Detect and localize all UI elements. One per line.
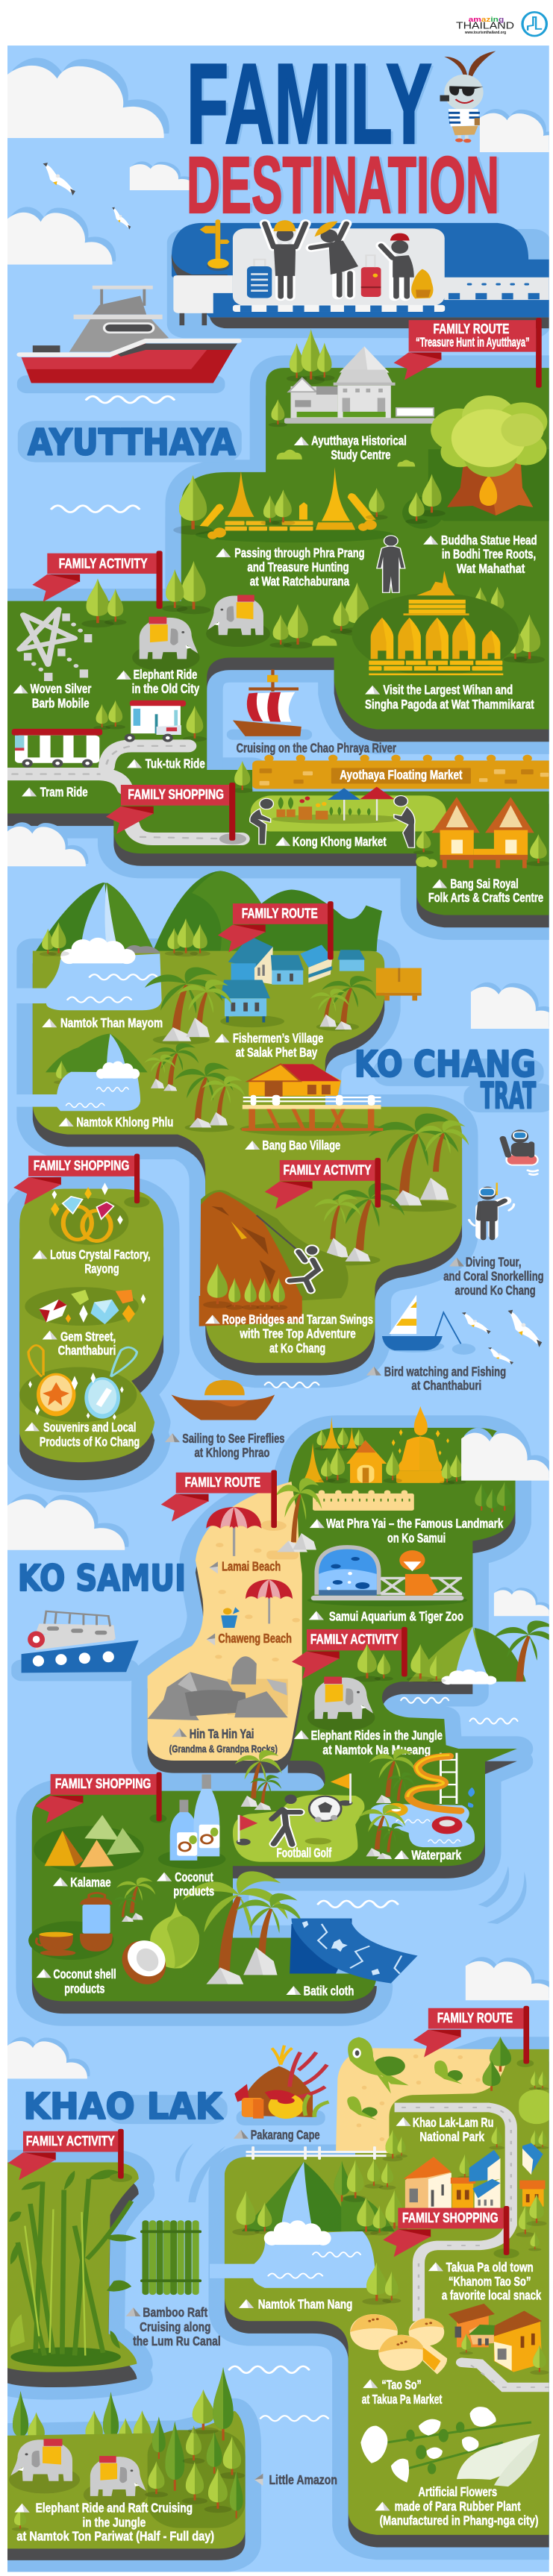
label: Gem Street: Gem Street, bbox=[60, 1330, 116, 1344]
label: Phra Prang and Treasure Hunting bbox=[216, 546, 365, 589]
label: Elephant Rides bbox=[294, 1729, 443, 1758]
Bang Bao Village stilt house bbox=[242, 1064, 383, 1131]
flag: FAMILY SHOPPING bbox=[106, 783, 246, 844]
label: Tram Ride bbox=[22, 786, 88, 800]
label: Lotus Crystal Factory: Rayong bbox=[84, 1262, 119, 1276]
flag: FAMILY ROUTE Treasure Hunt bbox=[394, 318, 542, 388]
island: Ko Chang bbox=[33, 951, 462, 1363]
label: Chaweng Beach bbox=[207, 1632, 292, 1646]
flag: FAMILY ACTIVITY Khao Lak: FAMILY ACTIVITY bbox=[26, 2133, 115, 2149]
lake waves bbox=[401, 1698, 518, 1724]
Takua Pa shophouses bbox=[449, 2304, 549, 2387]
icon: firefly long boat bbox=[172, 1380, 275, 1420]
label: Samui Aquarium bbox=[309, 1610, 463, 1624]
flag: FAMILY ACTIVITY Ko Chang: FAMILY ACTIVITY bbox=[284, 1162, 372, 1178]
flag: FAMILY SHOPPING Khao Lak bbox=[383, 2206, 519, 2258]
bamboo grove island bbox=[9, 2169, 137, 2366]
label: Bamboo Raft: Cruising along bbox=[140, 2320, 210, 2334]
flag: FAMILY ROUTE Khao Lak bbox=[413, 2006, 534, 2067]
label: Bamboo Raft: the Lum Ru Canal bbox=[133, 2334, 221, 2348]
artificial flowers and rubber leaves bbox=[360, 2407, 540, 2486]
label: Elephant Ride and Raft: Elephant Ride and Raft Cruising bbox=[36, 2501, 193, 2516]
cloud right of Samui bbox=[494, 1588, 552, 1616]
label: Souvenirs bbox=[25, 1420, 140, 1450]
label: Khao Lak-Lam Ru: Khao Lak-Lam Ru bbox=[413, 2116, 493, 2130]
flag: FAMILY SHOPPING Ko Chang bbox=[13, 1154, 149, 1208]
title: DESTINATION bbox=[190, 155, 499, 215]
label: Lotus Crystal Factory bbox=[32, 1248, 150, 1276]
label: Namtok Than Mayom: Namtok Than Mayom bbox=[60, 1016, 163, 1030]
label: Ayutthaya Historical Study Centre bbox=[294, 434, 407, 463]
label: Bamboo Raft bbox=[126, 2306, 221, 2348]
label: Coconut products: Coconut bbox=[175, 1870, 213, 1884]
island: Ko Chang shopping area bbox=[19, 1189, 163, 1462]
label: Kalamae bbox=[53, 1875, 111, 1890]
family figures and luggage bbox=[247, 220, 433, 298]
label: Takua Pa old town bbox=[428, 2260, 542, 2303]
cliff faces bbox=[7, 380, 549, 1480]
label: Ayutthaya Historical Study Centre: Study Centre bbox=[331, 448, 390, 463]
label: Souvenirs: Products of Ko Chang bbox=[40, 1435, 140, 1450]
Wat Thammikarat pagoda and lions bbox=[352, 571, 519, 676]
label: Chao Phraya cruise: Cruising on the Chao Phraya River bbox=[237, 742, 396, 756]
label: Woven Silver Barb Mobile bbox=[13, 682, 92, 711]
icon: swimmer with ring bbox=[503, 1129, 537, 1175]
icon: elephants at Ton Pariwat bbox=[9, 2439, 148, 2508]
label: Pakarang Cape bbox=[234, 2128, 320, 2143]
aquarium and tiger zoo bbox=[307, 1545, 467, 1606]
turtle beach sand bbox=[336, 2048, 508, 2153]
trees near flag bbox=[354, 1643, 446, 1683]
label: Kong Khong Market bbox=[275, 835, 387, 849]
label: Elephant Ride: in the Old City bbox=[132, 682, 200, 697]
icon: big coconut and palms bbox=[116, 1871, 302, 1988]
beach sand bbox=[148, 1482, 302, 1761]
label: Lamai Beach bbox=[209, 1560, 281, 1574]
icon: small turtles bbox=[347, 2061, 463, 2120]
label: Souvenirs: Souvenirs and Local bbox=[43, 1420, 136, 1435]
label: Gem Street: Chanthaburi bbox=[58, 1344, 116, 1358]
Khao Lak heading: KHAO LAK bbox=[23, 2087, 223, 2128]
flag: FAMILY SHOPPING Samui: FAMILY SHOPPING bbox=[55, 1776, 151, 1791]
label: Football Golf: Football Golf bbox=[276, 1846, 331, 1861]
label: Lotus Crystal Factory: Lotus Crystal Factory, bbox=[50, 1248, 150, 1262]
label: Waterpark bbox=[394, 1849, 462, 1863]
label: Fishermen's Village: Fishermen’s Village bbox=[233, 1032, 323, 1046]
Hin Ta Hin Yai rocks bbox=[148, 1656, 288, 1720]
cloud middle left bbox=[7, 207, 116, 265]
label: Coconut shell products: Coconut shell bbox=[53, 1967, 116, 1982]
hill and waterfall at Namtok Na Mueang bbox=[409, 1620, 553, 1685]
title: FAMILY bbox=[190, 63, 434, 145]
wave bbox=[318, 1901, 398, 1908]
Bodhi tree with Buddha head bbox=[402, 395, 549, 529]
logo: Amazing Thailand and tourism authority: amazing bbox=[469, 16, 504, 23]
road bbox=[395, 2108, 511, 2322]
label: Namtok Than Mayom bbox=[42, 1016, 163, 1030]
Samui lower scene bbox=[7, 1727, 553, 2143]
label: Elephant Ride bbox=[116, 668, 200, 697]
label: Batik cloth: Batik cloth bbox=[304, 1984, 354, 1999]
icon: Kalamae pyramids bbox=[34, 1815, 144, 1873]
label: Pakarang Cape: Pakarang Cape bbox=[251, 2128, 320, 2143]
label: Bamboo Raft: Bamboo Raft bbox=[143, 2306, 207, 2320]
label: Tuk-tuk Ride: Tuk-tuk Ride bbox=[146, 757, 205, 771]
label: Bang Sai bbox=[428, 877, 543, 906]
label: Sailing to See Fireflies: Sailing to See Fireflies bbox=[182, 1432, 284, 1446]
cloud right of Samui south bbox=[466, 1957, 553, 2000]
floating market wall bbox=[252, 755, 553, 789]
label: Coconut products: products bbox=[173, 1884, 214, 1899]
Ayutthaya scene bbox=[7, 329, 553, 868]
label: Tao So: at Takua Pa Market bbox=[362, 2392, 443, 2407]
road bbox=[7, 746, 242, 839]
label: Namtok Khlong Phlu: Namtok Khlong Phlu bbox=[76, 1115, 173, 1129]
standing visitor silhouette bbox=[378, 536, 404, 592]
label: Rope Bridges: with Tree Top Adventure bbox=[240, 1327, 356, 1341]
label: Tao So bbox=[362, 2378, 443, 2407]
label: Artificial Flowers: Artificial Flowers bbox=[418, 2485, 497, 2499]
label: Hin Ta Hin Yai: (Grandma & Grandpa Rocks) bbox=[169, 1743, 278, 1755]
Khao Lak upper beach bbox=[336, 2006, 553, 2322]
label: Lamai Beach: Lamai Beach bbox=[222, 1560, 281, 1574]
label: Chaweng Beach: Chaweng Beach bbox=[218, 1632, 292, 1646]
label: Samui Aquarium: Samui Aquarium & Tiger Zoo bbox=[329, 1610, 463, 1624]
label: Bird watching: at Chanthaburi bbox=[411, 1379, 481, 1394]
label: Tram Ride: Tram Ride bbox=[40, 786, 88, 800]
palms and rocks bbox=[144, 967, 469, 1262]
icon: yellow signpost bbox=[200, 219, 230, 271]
trees near national park bbox=[382, 2126, 549, 2161]
Khao Lak main scene bbox=[7, 2129, 549, 2548]
label: Kalamae: Kalamae bbox=[70, 1875, 111, 1890]
logo: Amazing Thailand and tourism authority: www.tourismthailand.org bbox=[464, 31, 506, 35]
label: Rope Bridges bbox=[205, 1313, 373, 1356]
bushes bbox=[276, 450, 415, 646]
label: Fishermen's Village bbox=[215, 1032, 323, 1060]
Namtok Khlong Phlu waterfall and lake bbox=[14, 1034, 148, 1111]
label: Wat Phra Yai bbox=[310, 1517, 504, 1546]
label: Ayutthaya Historical Study Centre: Ayutthaya Historical bbox=[311, 434, 407, 448]
label: Elephant Ride and Raft: in the Jungle bbox=[82, 2516, 146, 2530]
island: Ayutthaya bbox=[7, 368, 549, 915]
label: Bird watching bbox=[366, 1365, 506, 1394]
Namtok Than Mayom waterfall and lake bbox=[14, 918, 210, 1010]
Samui beach bbox=[148, 1494, 302, 1773]
local souvenirs pendants bbox=[19, 1345, 137, 1422]
cruise ship Ko Samui bbox=[11, 1611, 139, 1681]
Fishermen's Village blue houses bbox=[220, 936, 366, 1022]
label: Little Amazon: Little Amazon bbox=[269, 2473, 337, 2487]
flag: FAMILY ROUTE Ko Chang: FAMILY ROUTE bbox=[242, 906, 318, 921]
icon: snorkeller standing bbox=[469, 1182, 514, 1238]
floating market wall: Ayothaya Floating Market bbox=[340, 768, 463, 783]
Wat Phra Yai temple complex bbox=[302, 1406, 513, 1512]
label: Coconut shell products: products bbox=[64, 1982, 104, 1996]
flag: FAMILY ACTIVITY: FAMILY ACTIVITY bbox=[59, 556, 148, 571]
logo: Amazing Thailand and tourism authority bbox=[456, 12, 546, 36]
icon: coconut bottles bbox=[158, 1774, 225, 1869]
flag: FAMILY ACTIVITY Ko Chang bbox=[265, 1158, 381, 1209]
label: Elephant Ride: Elephant Ride bbox=[134, 668, 197, 682]
small palms bbox=[113, 1878, 155, 1922]
cruise ship with family on deck bbox=[167, 219, 551, 338]
gems bbox=[25, 1287, 146, 1326]
icon: bamboo raft bbox=[140, 2220, 201, 2295]
mascot with sunglasses and camera bbox=[440, 51, 496, 142]
flag: FAMILY ACTIVITY Khao Lak bbox=[8, 2129, 132, 2182]
icon: elephants bbox=[132, 595, 270, 671]
label: Wat Phra Yai: on Ko Samui bbox=[387, 1532, 446, 1546]
waterpark bbox=[358, 1749, 475, 1859]
Ko Chang heading bbox=[354, 1044, 553, 1118]
logo: Amazing Thailand and tourism authority: THAILAND bbox=[456, 20, 514, 31]
clouds in Ko Chang region bbox=[7, 822, 553, 1029]
fence bbox=[246, 2146, 387, 2160]
flag: FAMILY ROUTE Ko Chang bbox=[218, 901, 334, 960]
icon: batik cloth bbox=[290, 1919, 418, 1983]
label: Woven Silver Barb Mobile: Woven Silver bbox=[30, 682, 92, 697]
flag: FAMILY ACTIVITY Samui bbox=[292, 1627, 407, 1679]
cloud near Wat Phra Yai bbox=[461, 1428, 553, 1481]
icon: small sailboat bbox=[382, 1295, 475, 1355]
icon: large turtle bbox=[348, 2037, 409, 2093]
wooden pier bbox=[376, 968, 422, 1000]
Rope bridge cliff bbox=[199, 1190, 349, 1326]
forest on elephant land bbox=[12, 2367, 246, 2531]
label: Little Amazon bbox=[254, 2473, 337, 2487]
icon: gems, pendants and sail items around Ko Chang bbox=[7, 1287, 553, 1616]
label: Khao Lak-Lam Ru: National Park bbox=[419, 2130, 485, 2144]
Ayutthaya heading: AYUTTHAYA bbox=[28, 422, 236, 464]
ruins of Wat Ratchaburana bbox=[173, 467, 395, 542]
label: Bang Bao Village bbox=[245, 1138, 340, 1153]
label: Sailing to See Fireflies: at Khlong Phrao bbox=[194, 1446, 269, 1460]
label: Buddha Statue Head bbox=[423, 533, 537, 576]
old town houses bbox=[403, 2143, 547, 2251]
seagulls near Chanthaburi bbox=[462, 1310, 542, 1364]
swoosh lines bbox=[478, 1866, 527, 1924]
label: Tuk-tuk Ride bbox=[127, 757, 205, 771]
icon: tram bbox=[12, 729, 102, 768]
frame 1 header art bbox=[7, 41, 553, 403]
label: Elephant Ride and Raft: at Namtok Ton Pariwat (Half - Full day) bbox=[16, 2530, 214, 2544]
label: Phra Prang and Treasure Hunting: Passing through Phra Prang bbox=[234, 546, 365, 561]
label: Rope Bridges: Rope Bridges and Tarzan Swings bbox=[222, 1313, 373, 1327]
icon: Lotus crystal rings bbox=[49, 1182, 128, 1245]
icon: sailing junk on the Chao Phraya bbox=[227, 669, 312, 740]
label: Fishermen's Village: at Salak Phet Bay bbox=[236, 1046, 318, 1060]
label: Khao Lak-Lam Ru bbox=[396, 2116, 493, 2144]
label: Coconut products bbox=[157, 1870, 214, 1899]
label: Tao So: “Tao So” bbox=[381, 2378, 422, 2392]
seagulls bbox=[43, 163, 131, 230]
label: Elephant Rides: at Namtok Na Mueang bbox=[322, 1743, 431, 1758]
red and white motor yacht bbox=[17, 286, 239, 393]
label: Phra Prang and Treasure Hunting: and Treasure Hunting bbox=[247, 560, 349, 574]
flag: FAMILY SHOPPING Ko Chang: FAMILY SHOPPING bbox=[34, 1158, 129, 1173]
label: Diving Tour bbox=[443, 1256, 544, 1298]
label: Wat Thammikarat bbox=[365, 683, 534, 712]
swooshes bbox=[175, 2143, 225, 2202]
Ayutthaya heading bbox=[18, 421, 242, 464]
trees north Khao Lak bbox=[482, 2037, 553, 2124]
label: Rope Bridges: at Ko Chang bbox=[269, 1341, 325, 1356]
cloud top right bbox=[480, 109, 553, 152]
flag: FAMILY ROUTE Samui: FAMILY ROUTE bbox=[185, 1475, 260, 1490]
sand dots bbox=[357, 2055, 481, 2141]
label: Bang Bao Village: Bang Bao Village bbox=[262, 1138, 340, 1153]
label: Phra Prang and Treasure Hunting: at Wat Ratchaburana bbox=[250, 574, 350, 589]
Khao Lak lands bbox=[7, 2049, 549, 2560]
label: Elephant Ride and Raft bbox=[15, 2501, 214, 2544]
football golf green bbox=[233, 1773, 364, 1862]
icon: coconut shell lantern and cup bbox=[28, 1893, 113, 1960]
island: elephant land bbox=[7, 2410, 246, 2548]
label: Hin Ta Hin Yai: Hin Ta Hin Yai bbox=[190, 1727, 254, 1741]
beach decorations bbox=[148, 1478, 322, 1720]
label: Hin Ta Hin Yai bbox=[169, 1727, 278, 1755]
mountains behind Ko Chang bbox=[36, 871, 382, 951]
icon: elephant Samui bbox=[307, 1677, 375, 1732]
trees around Ayutthaya bbox=[81, 561, 550, 866]
label: Waterpark: Waterpark bbox=[411, 1849, 462, 1863]
flag: FAMILY ACTIVITY Samui: FAMILY ACTIVITY bbox=[310, 1632, 399, 1647]
flag: FAMILY ROUTE Samui bbox=[161, 1470, 287, 1531]
flag: FAMILY SHOPPING Samui bbox=[36, 1772, 166, 1823]
Ko Samui heading: KO SAMUI bbox=[18, 1558, 186, 1599]
label: Kong Khong Market: Kong Khong Market bbox=[293, 835, 387, 849]
waves bbox=[229, 2366, 328, 2421]
wave bbox=[265, 1382, 319, 1388]
icon: tuk-tuk bbox=[125, 701, 186, 742]
Ko Samui base: cliffs and land bbox=[11, 1313, 553, 2014]
label: Namtok Tham Nang bbox=[239, 2298, 352, 2312]
Tao So buns bbox=[350, 2314, 447, 2375]
cloud beside title bbox=[130, 161, 190, 190]
palms beside golf bbox=[235, 1750, 282, 1810]
label: Elephant Rides: Elephant Rides in the Jungle bbox=[311, 1729, 443, 1743]
label: Namtok Tham Nang: Namtok Tham Nang bbox=[258, 2298, 352, 2312]
label: Woven Silver Barb Mobile: Barb Mobile bbox=[32, 697, 90, 711]
forest behind elephant land bbox=[13, 2391, 154, 2448]
Ko Chang scene bbox=[13, 871, 553, 1462]
label: Namtok Khlong Phlu bbox=[59, 1115, 173, 1129]
Ayutthaya Historical Study Centre building bbox=[269, 329, 435, 427]
cloud Khao Lak left bbox=[7, 2037, 90, 2078]
shade under trees and houses bbox=[153, 1015, 457, 1265]
icon: woven silver barb mobile bbox=[19, 609, 92, 681]
wave bbox=[51, 506, 139, 513]
label: Batik cloth bbox=[286, 1984, 354, 1999]
Thai houses: Bang Sai bbox=[416, 797, 534, 868]
label: Artificial Flowers bbox=[375, 2485, 538, 2528]
label: Coconut shell products bbox=[37, 1967, 116, 1996]
icon: Pakarang coral bbox=[234, 2046, 328, 2125]
flag: FAMILY SHOPPING: FAMILY SHOPPING bbox=[128, 787, 224, 803]
cloud left of Samui bbox=[7, 1494, 129, 1550]
Kong Khong market stalls bbox=[250, 787, 446, 847]
mountains and waterfall bbox=[210, 2159, 407, 2304]
wave bbox=[87, 396, 174, 403]
cloud top left bbox=[7, 58, 169, 138]
label: Sailing to See Fireflies bbox=[165, 1432, 284, 1460]
label: Gem Street bbox=[43, 1330, 116, 1358]
flag: FAMILY ACTIVITY bbox=[32, 551, 163, 609]
